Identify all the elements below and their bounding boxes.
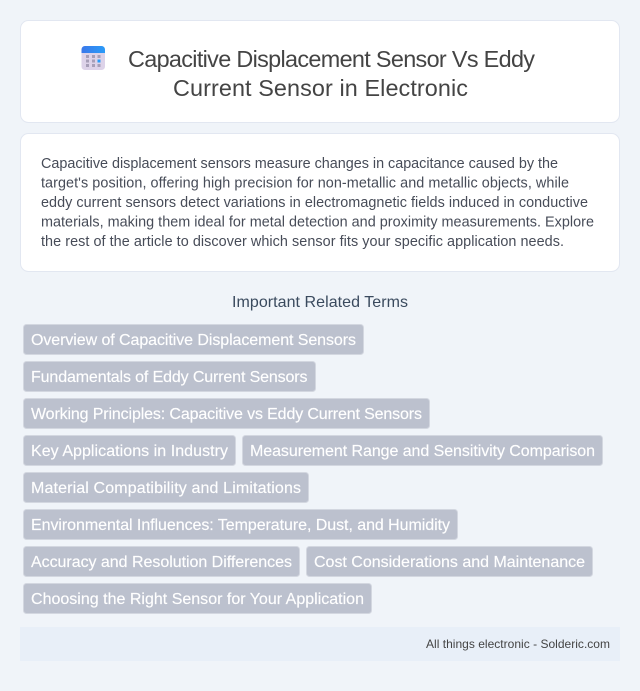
title: Current Sensor in Electronic: [173, 75, 468, 101]
description text: the rest of the article to discover which sensor fits your specific application needs.: [41, 234, 564, 250]
tag: material compatibility: [24, 472, 308, 502]
panel: title card: [20, 20, 620, 122]
tag: key applications: [24, 436, 236, 466]
title: Capacitive Displacement Sensor Vs Eddy: [128, 46, 535, 72]
tag: accuracy and resolution: [24, 546, 300, 576]
icon: calendar: [82, 46, 105, 70]
tag: cost considerations: Cost Considerations and Maintenance: [314, 554, 585, 571]
tag: working principles: [24, 398, 430, 428]
tag: measurement range: Measurement Range and Sensitivity Comparison: [250, 443, 595, 460]
footer: [20, 627, 620, 661]
tag: choosing the right sensor: [24, 584, 372, 614]
description text: [41, 156, 594, 250]
description text: target's position, offering high precision for non-metallic and metallic objects, while: [41, 176, 569, 192]
tag: choosing the right sensor: Choosing the Right Sensor for Your Application: [31, 591, 364, 608]
tag: environmental influences: Environmental Influences: Temperature, Dust, and Humidity: [31, 517, 450, 534]
tag: environmental influences: [24, 510, 458, 540]
tag: key applications: Key Applications in Industry: [31, 443, 228, 460]
description text: eddy current sensors detect variations in electromagnetic fields induced in conductive: [41, 195, 588, 211]
tag: accuracy and resolution: Accuracy and Resolution Differences: [31, 554, 292, 571]
title: [128, 46, 535, 101]
tag: measurement range: [242, 436, 602, 466]
tag: fundamentals: [24, 362, 316, 392]
tag: fundamentals: Fundamentals of Eddy Current Sensors: [31, 369, 308, 386]
heading: important related terms: Important Related Terms: [232, 294, 408, 311]
tag: cost considerations: [306, 546, 592, 576]
tag: material compatibility: Material Compatibility and Limitations: [31, 480, 301, 497]
description text: materials, making them ideal for metal detection and proximity measurements. Explore: [41, 214, 594, 230]
panel: description card: [20, 134, 620, 272]
tag: overview: [24, 324, 364, 354]
footer: All things electronic - Solderic.com: [426, 637, 610, 651]
tag: working principles: Working Principles: Capacitive vs Eddy Current Sensors: [31, 406, 422, 423]
description text: Capacitive displacement sensors measure changes in capacitance caused by the: [41, 156, 558, 172]
panel: tag list: [24, 324, 602, 614]
tag: overview: Overview of Capacitive Displacement Sensors: [31, 332, 356, 349]
